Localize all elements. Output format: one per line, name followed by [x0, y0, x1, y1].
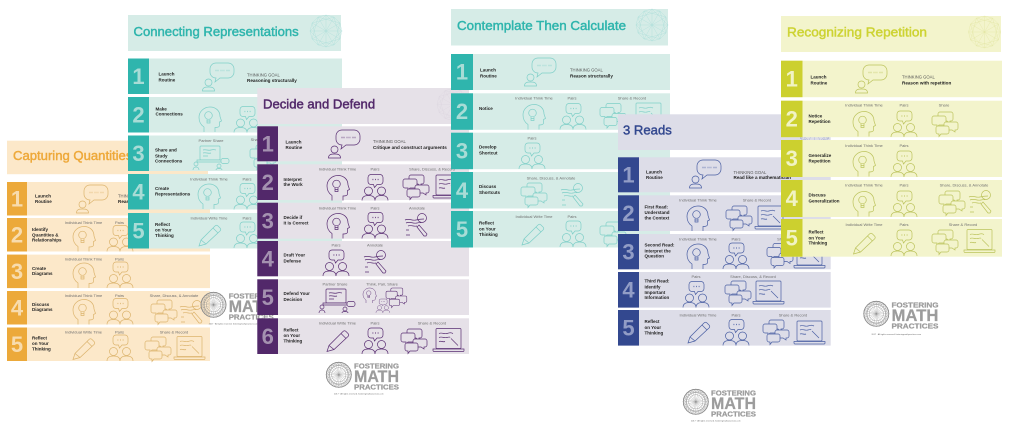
- step 1 row: 1: [622, 162, 635, 188]
- heading: Recognizing Repetition: [781, 16, 1001, 52]
- step 6 row: [257, 318, 469, 354]
- step 5 row: on Your: [644, 325, 661, 330]
- logo: Recognizing Repetition: [861, 298, 939, 336]
- step 3 row: Generalize: [808, 153, 831, 158]
- step 4 row: Representations: [155, 192, 191, 197]
- step 3 row: Question: [644, 254, 664, 259]
- step 1 row: [257, 126, 469, 161]
- step 5 row: Pairs: [567, 214, 577, 219]
- step 5 row: Individual Write Time: [515, 214, 553, 219]
- step 2 row: Pairs: [567, 96, 577, 101]
- step 4 row: Identify: [644, 285, 661, 290]
- step 5 row: 5: [622, 316, 635, 340]
- step 3 row: it is Correct: [284, 221, 309, 226]
- step 1 row: 1: [456, 60, 468, 85]
- step 3 row: 3: [786, 146, 798, 171]
- step 4 row: Third Read:: [644, 279, 670, 284]
- heading: Capturing Quantities: [7, 141, 208, 174]
- step 2 row: Interpret: [284, 177, 302, 182]
- heading: Contemplate Then Calculate: Contemplate Then Calculate: [457, 18, 626, 33]
- step 2 row: the Context: [644, 216, 670, 221]
- step 5 row: Share & Record: [160, 330, 188, 334]
- logo: Decide and Defend: PRACTICES: [354, 382, 399, 392]
- step 3 row: Interpret the: [644, 249, 671, 254]
- panel: 3 Reads: [618, 114, 831, 346]
- step 4 row: 4: [456, 178, 469, 203]
- step 3 row: 3: [262, 208, 274, 233]
- step 1 row: Routine: [286, 145, 303, 150]
- step 2 row: Notice: [808, 114, 822, 119]
- step 1 row: [128, 58, 342, 94]
- step 2 row: Pairs: [899, 103, 909, 108]
- step 1 row: Launch: [646, 170, 662, 175]
- step 5 row: 5: [786, 226, 798, 250]
- step 1 row: Critique and construct arguments: [373, 145, 447, 150]
- step 3 row: [7, 255, 210, 288]
- step 1 row: Routine: [35, 199, 52, 204]
- panel: Contemplate Then Calculate: [451, 9, 670, 248]
- panel: Recognizing Repetition: [781, 16, 1002, 257]
- step 3 row: Share and: [155, 148, 177, 153]
- logo: Decide and Defend: 2017 · All rights reserved. fosteringmathpractices.com: [334, 392, 384, 396]
- step 1 row: Reasoning structurally: [247, 78, 297, 83]
- heading: Capturing Quantities: Capturing Quantities: [13, 148, 133, 163]
- step 5 row: Reflect: [808, 230, 824, 235]
- step 4 row: 4: [622, 278, 635, 302]
- logo: Recognizing Repetition: 2017 · All rights reserved. fosteringmathpractices.com: [872, 333, 921, 336]
- step 4 row: 4: [11, 296, 24, 320]
- step 5 row: Reflect: [155, 222, 170, 227]
- panel: Decide and Defend: [257, 88, 469, 354]
- step 1 row: [781, 61, 1002, 97]
- step 2 row: Individual Think Time: [845, 103, 884, 108]
- step 5 row: on Your: [155, 228, 172, 233]
- step 3 row: Share: [251, 137, 262, 142]
- step 2 row: the Work: [284, 182, 303, 187]
- logo: 3 Reads: [680, 386, 756, 422]
- step 1 row: [618, 157, 831, 192]
- step 3 row: Second Read:: [644, 243, 675, 248]
- logo: 3 Reads: PRACTICES: [711, 410, 756, 418]
- step 5 row: Thinking: [808, 241, 827, 246]
- heading: Decide and Defend: Decide and Defend: [263, 97, 375, 112]
- step 4 row: Generalization: [808, 199, 840, 204]
- step 5 row: Decision: [284, 297, 303, 302]
- step 4 row: Share, Discuss, & Annotate: [940, 183, 989, 188]
- heading: 3 Reads: [618, 114, 831, 150]
- step 4 row: 4: [132, 180, 145, 204]
- step 2 row: [7, 218, 210, 252]
- step 1 row: [451, 54, 670, 90]
- step 1 row: Reason structurally: [570, 74, 613, 78]
- step 1 row: Routine: [158, 78, 176, 82]
- logo: 3 Reads: 2017 · All rights reserved. fosteringmathpractices.com: [691, 420, 741, 422]
- step 4 row: Pairs: [331, 243, 341, 248]
- step 2 row: Notice: [479, 106, 493, 111]
- step 1 row: THINKING GOAL: [118, 194, 151, 198]
- step 4 row: Information: [644, 295, 669, 300]
- step 4 row: Discuss: [808, 193, 826, 198]
- step 4 row: Pairs: [242, 177, 252, 182]
- step 5 row: 5: [456, 217, 468, 242]
- step 5 row: on Your: [808, 236, 825, 241]
- step 5 row: 5: [132, 218, 145, 244]
- step 6 row: Thinking: [284, 339, 302, 344]
- step 5 row: Reflect: [644, 319, 660, 324]
- step 2 row: [451, 93, 670, 130]
- panel: Connecting Representations: [128, 15, 342, 248]
- logo: Decide and Defend: FOSTERING: [354, 362, 399, 370]
- step 6 row: Reflect: [284, 328, 299, 333]
- logo: Decide and Defend: [323, 359, 399, 396]
- step 5 row: [618, 310, 831, 346]
- heading: Recognizing Repetition: Recognizing Repetition: [787, 24, 927, 40]
- step 5 row: Individual Write Time: [190, 216, 228, 221]
- step 3 row: Diagrams: [32, 271, 53, 276]
- step 5 row: on Your: [32, 341, 49, 346]
- step 1 row: Reason with repetition: [902, 81, 951, 86]
- step 4 row: Share, Discuss, & Record: [730, 274, 776, 279]
- step 1 row: Launch: [286, 140, 302, 145]
- step 1 row: THINKING GOAL: [734, 170, 767, 175]
- step 6 row: Share & Record: [418, 321, 446, 326]
- step 2 row: Share, Discuss, & Record: [409, 167, 455, 172]
- step 4 row: Pairs: [115, 293, 124, 298]
- step 4 row: Share, Discuss, & Annotate: [150, 293, 199, 298]
- step 5 row: [128, 213, 342, 248]
- logo: Recognizing Repetition: MATH: [892, 306, 938, 325]
- step 3 row: 3: [132, 141, 145, 166]
- step 3 row: 3: [456, 138, 468, 164]
- step 1 row: 1: [132, 64, 145, 89]
- step 4 row: Important: [644, 290, 666, 295]
- step 6 row: Pairs: [370, 321, 380, 326]
- heading: Decide and Defend: [257, 88, 469, 124]
- step 3 row: 3: [11, 259, 23, 284]
- step 4 row: [7, 291, 210, 324]
- step 2 row: 2: [622, 201, 635, 226]
- step 2 row: Share & Record: [743, 198, 771, 203]
- logo: Recognizing Repetition: PRACTICES: [892, 322, 939, 330]
- step 1 row: THINKING GOAL: [373, 139, 406, 144]
- step 4 row: [451, 172, 670, 208]
- step 4 row: 4: [262, 246, 275, 271]
- step 1 row: 1: [262, 132, 274, 156]
- step 4 row: [781, 180, 1002, 217]
- step 4 row: Diagrams: [32, 307, 53, 312]
- step 2 row: Pairs: [115, 220, 124, 225]
- step 4 row: Individual Think Time: [845, 183, 884, 188]
- step 4 row: Individual Think Time: [190, 177, 229, 182]
- logo: Capturing Quantities: MATH: [229, 297, 274, 316]
- step 2 row: Individual Think Time: [319, 167, 357, 172]
- step 5 row: Pairs: [899, 222, 909, 227]
- step 2 row: 2: [11, 222, 23, 248]
- step 1 row: Launch: [158, 72, 175, 77]
- step 1 row: Routine: [646, 175, 663, 180]
- step 4 row: [257, 241, 469, 276]
- step 5 row: Pairs: [242, 216, 252, 221]
- step 2 row: [128, 97, 342, 132]
- step 1 row: [7, 182, 210, 216]
- step 4 row: Shortcuts: [479, 190, 500, 195]
- step 5 row: Reflect: [32, 336, 47, 340]
- step 2 row: Relationships: [32, 238, 62, 242]
- step 4 row: Draft Your: [284, 253, 305, 258]
- step 4 row: Pairs: [691, 274, 701, 279]
- step 5 row: Thinking: [155, 233, 174, 238]
- step 3 row: Individual Think Time: [65, 257, 103, 262]
- step 5 row: Pairs: [115, 330, 124, 334]
- step 3 row: Create: [32, 266, 46, 271]
- step 2 row: [781, 101, 1002, 137]
- panel: Capturing Quantities: [7, 141, 210, 362]
- step 5 row: [781, 219, 1002, 257]
- step 2 row: Make: [156, 106, 167, 112]
- step 3 row: [451, 133, 670, 169]
- step 6 row: on Your: [284, 333, 300, 338]
- step 5 row: Reflect: [479, 221, 494, 226]
- step 1 row: Launch: [810, 75, 827, 80]
- step 3 row: [618, 234, 831, 269]
- step 2 row: [618, 195, 831, 231]
- step 3 row: [781, 140, 1002, 177]
- step 3 row: Pairs: [527, 136, 537, 141]
- step 5 row: Individual Write Time: [845, 222, 883, 227]
- step 3 row: Study: [155, 154, 168, 158]
- step 2 row: Connections: [156, 112, 183, 117]
- step 6 row: Individual Write Time: [319, 321, 357, 326]
- step 3 row: Annotate: [409, 206, 426, 211]
- step 5 row: Individual Write Time: [679, 313, 717, 318]
- step 1 row: THINKING GOAL: [247, 72, 280, 78]
- step 3 row: Decide if: [284, 215, 302, 220]
- step 1 row: Launch: [35, 194, 51, 198]
- step 3 row: Repetition: [808, 159, 831, 164]
- logo: 3 Reads: FOSTERING: [711, 388, 756, 398]
- step 2 row: Repetition: [808, 119, 831, 124]
- step 2 row: 2: [786, 106, 798, 132]
- step 2 row: Identify: [32, 227, 48, 232]
- step 4 row: Individual Think Time: [65, 293, 103, 298]
- step 2 row: Share & Record: [618, 96, 646, 101]
- logo: Capturing Quantities: [198, 289, 274, 326]
- step 2 row: Individual Think Time: [679, 198, 718, 203]
- step 3 row: Shortcut: [479, 151, 498, 156]
- step 4 row: Annotate: [367, 243, 384, 248]
- step 5 row: Thinking: [644, 331, 663, 336]
- step 1 row: Routine: [480, 74, 497, 78]
- step 2 row: 2: [456, 99, 468, 124]
- logo: 3 Reads: MATH: [711, 394, 756, 413]
- step 5 row: Partner Share: [323, 282, 348, 287]
- step 1 row: 1: [786, 66, 798, 92]
- step 2 row: [257, 164, 469, 200]
- step 5 row: Share & Record: [618, 214, 646, 219]
- step 5 row: Share & Record: [779, 313, 807, 318]
- logo: Decide and Defend: MATH: [354, 367, 399, 386]
- step 4 row: [618, 272, 831, 308]
- step 5 row: Individual Write Time: [65, 330, 103, 334]
- step 4 row: 4: [786, 186, 799, 211]
- step 3 row: [128, 136, 342, 171]
- logo: Capturing Quantities: 2017 · All rights reserved. fosteringmathpractices.com: [209, 322, 259, 326]
- step 4 row: [128, 174, 342, 210]
- logo: Recognizing Repetition: FOSTERING: [892, 300, 939, 310]
- step 1 row: Reason abstractly: [118, 199, 158, 204]
- logo: Capturing Quantities: PRACTICES: [229, 312, 274, 322]
- step 5 row: Pairs: [731, 313, 741, 318]
- step 5 row: Thinking: [32, 346, 51, 352]
- step 1 row: THINKING GOAL: [570, 68, 603, 72]
- step 2 row: 2: [262, 170, 274, 195]
- step 3 row: [257, 203, 469, 239]
- step 3 row: Pairs: [899, 143, 909, 148]
- step 5 row: Think, Pair, Share: [366, 282, 399, 287]
- step 1 row: Launch: [480, 68, 496, 72]
- step 4 row: Defense: [284, 259, 302, 264]
- step 5 row: 5: [11, 332, 23, 357]
- step 3 row: Individual Think Time: [679, 237, 718, 242]
- step 5 row: Thinking: [479, 232, 498, 237]
- step 2 row: Pairs: [370, 167, 380, 172]
- step 3 row: Individual Think Time: [319, 206, 357, 211]
- step 5 row: on Your: [479, 227, 496, 232]
- step 1 row: THINKING GOAL: [902, 75, 935, 80]
- step 5 row: [451, 211, 670, 248]
- step 4 row: Create: [155, 186, 169, 191]
- step 5 row: [7, 328, 210, 362]
- step 2 row: Understand: [644, 210, 670, 215]
- step 3 row: Pairs: [731, 237, 741, 242]
- step 4 row: Discuss: [479, 184, 496, 189]
- step 3 row: Partner Share: [199, 138, 224, 143]
- heading: 3 Reads: 3 Reads: [623, 122, 672, 138]
- step 4 row: Pairs: [899, 183, 909, 188]
- step 2 row: Quantities &: [32, 232, 59, 238]
- logo: Capturing Quantities: FOSTERING: [229, 292, 274, 300]
- step 1 row: Read like a mathematician: [734, 175, 791, 180]
- step 3 row: Share, Discuss, & Record: [777, 237, 823, 242]
- step 3 row: Connections: [155, 159, 183, 164]
- step 4 row: Share, Discuss, & Annotate: [527, 176, 576, 181]
- step 2 row: First Read:: [644, 205, 668, 210]
- step 3 row: Individual Think Time: [845, 143, 884, 148]
- step 4 row: Discuss: [32, 302, 49, 307]
- step 2 row: Individual Think Time: [515, 96, 554, 101]
- step 2 row: 2: [132, 102, 145, 128]
- step 1 row: 1: [11, 186, 23, 212]
- step 6 row: 6: [262, 324, 274, 349]
- heading: Connecting Representations: Connecting Representations: [134, 24, 299, 39]
- step 5 row: Defend Your: [284, 291, 310, 296]
- step 3 row: Pairs: [115, 257, 124, 262]
- step 2 row: Individual Think Time: [65, 220, 103, 225]
- step 2 row: Share: [939, 103, 950, 108]
- step 3 row: Pairs: [370, 206, 380, 211]
- step 5 row: [257, 279, 469, 315]
- step 5 row: 5: [262, 285, 274, 310]
- heading: Connecting Representations: [128, 15, 342, 51]
- step 3 row: 3: [622, 239, 635, 264]
- step 1 row: Routine: [810, 81, 828, 86]
- step 5 row: Share & Record: [949, 222, 977, 227]
- step 3 row: Develop: [479, 145, 497, 150]
- heading: Contemplate Then Calculate: [451, 9, 668, 46]
